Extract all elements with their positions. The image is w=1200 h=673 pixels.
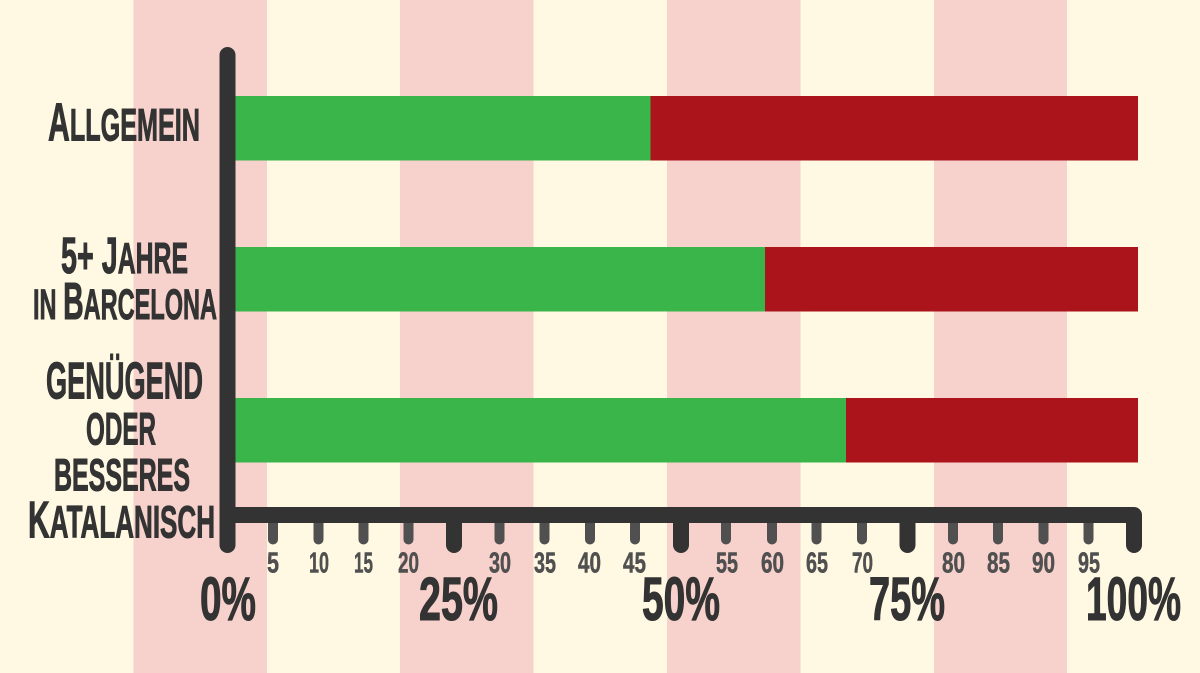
category label: Katalanisch: KATALANISCH <box>28 492 215 550</box>
minor ticks <box>268 515 1094 544</box>
minor axis labels: 55 <box>716 548 738 580</box>
minor axis labels: 10 <box>309 548 329 580</box>
bar: Genügend oder besseres Katalanisch <box>235 398 1138 462</box>
minor axis labels: 45 <box>623 548 646 580</box>
minor axis labels: 95 <box>1078 548 1100 580</box>
category label: 5+ Jahre: 5+ JAHRE <box>61 227 188 284</box>
minor axis labels: 70 <box>852 548 873 580</box>
category label: in Barcelona: IN BARCELONA <box>33 273 217 331</box>
category label: Genügend: GENÜGEND <box>46 352 203 410</box>
major axis labels: 25% <box>419 565 498 633</box>
bar: 5+ Jahre in Barcelona <box>235 247 1138 312</box>
major axis labels: 75% <box>869 565 945 633</box>
major axis labels <box>200 565 1181 633</box>
minor axis labels: 40 <box>578 548 601 580</box>
minor axis labels: 30 <box>489 548 511 580</box>
category label: Allgemein: ALLGEMEIN <box>48 92 200 152</box>
minor axis labels <box>267 548 1100 580</box>
bar: Allgemein <box>235 96 1138 160</box>
minor axis labels: 80 <box>942 548 965 580</box>
minor axis labels: 65 <box>806 548 828 580</box>
minor axis labels: 20 <box>398 548 419 580</box>
minor axis labels: 15 <box>354 548 373 580</box>
category label: besseres: BESSERES <box>54 450 190 500</box>
axes with major ticks <box>220 47 1142 553</box>
major axis labels: 50% <box>642 565 720 633</box>
minor axis labels: 35 <box>534 548 556 580</box>
minor axis labels: 60 <box>761 548 784 580</box>
minor axis labels: 85 <box>987 548 1010 580</box>
minor axis labels: 5 <box>267 548 279 580</box>
category label: oder: ODER <box>86 404 156 454</box>
major axis labels: 0% <box>200 565 256 633</box>
minor axis labels: 90 <box>1032 548 1055 580</box>
